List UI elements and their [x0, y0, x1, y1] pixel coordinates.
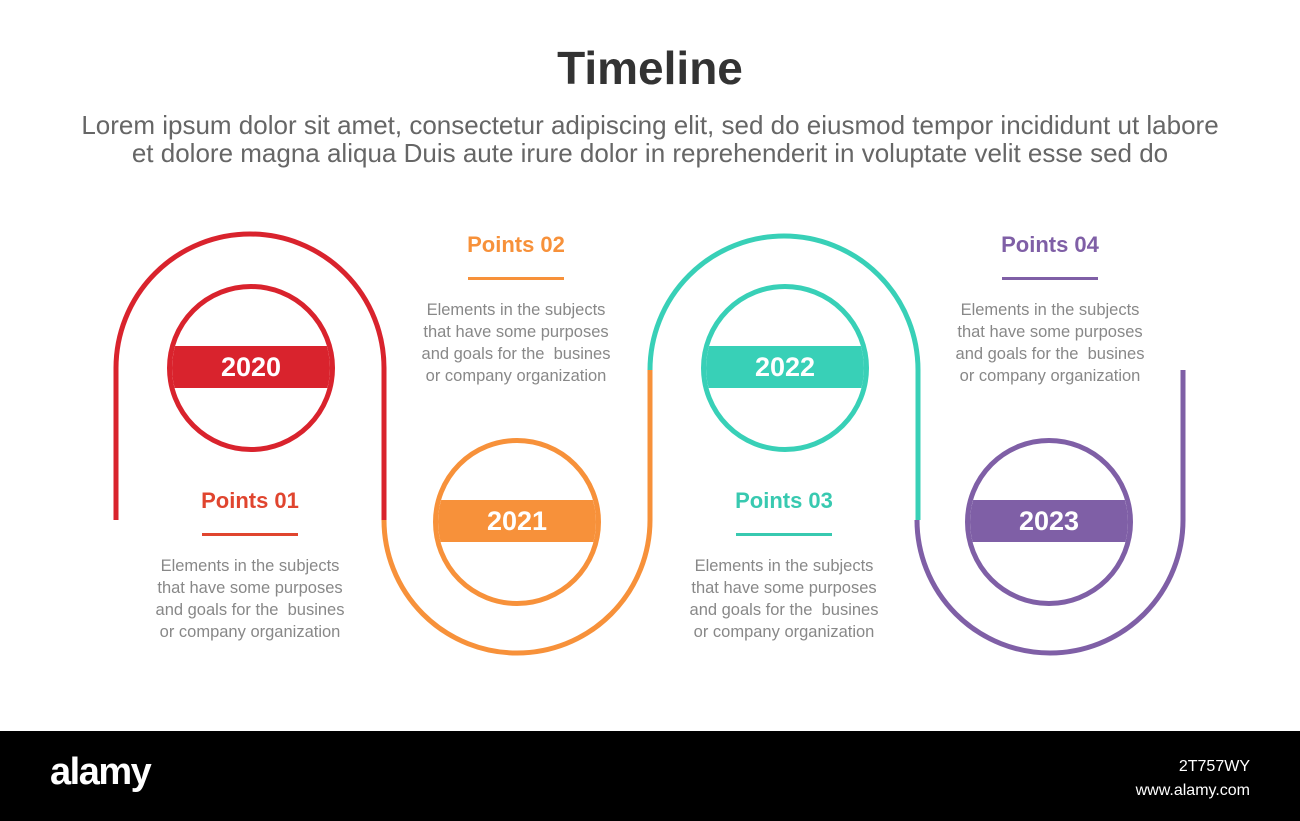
point 01 — [156, 488, 344, 641]
title: Timeline — [557, 42, 743, 94]
subtitle: et dolore magna aliqua Duis aute irure dolor in reprehenderit in voluptate velit esse sed do — [132, 138, 1168, 168]
circle 2023 — [965, 438, 1133, 606]
point 04: and goals for the busines — [956, 345, 1144, 363]
circle 2021: 2021 — [487, 506, 547, 536]
footer id — [1136, 758, 1250, 799]
footer id: 2T757WY — [1179, 758, 1250, 775]
point 02 — [422, 232, 610, 385]
point 04: Points 04 — [1001, 232, 1099, 257]
point 01: that have some purposes — [157, 579, 343, 597]
point 02: Elements in the subjects — [427, 301, 605, 319]
circle 2020 — [167, 284, 335, 452]
circle 2020: 2020 — [221, 352, 281, 382]
point 02: Points 02 — [467, 232, 565, 257]
point 04: or company organization — [960, 367, 1140, 385]
circle 2023: 2023 — [1019, 506, 1079, 536]
point 03: Elements in the subjects — [695, 557, 873, 575]
point 03: or company organization — [694, 623, 874, 641]
point 04 — [956, 232, 1144, 385]
point 01: or company organization — [160, 623, 340, 641]
point 02: and goals for the busines — [422, 345, 610, 363]
point 01: Elements in the subjects — [161, 557, 339, 575]
point 01: and goals for the busines — [156, 601, 344, 619]
circle 2022: 2022 — [755, 352, 815, 382]
footer id: www.alamy.com — [1136, 782, 1250, 799]
point 01: Points 01 — [201, 488, 299, 513]
point 03: and goals for the busines — [690, 601, 878, 619]
footer bar — [0, 731, 1300, 821]
subtitle: Lorem ipsum dolor sit amet, consectetur adipiscing elit, sed do eiusmod tempor incididunt ut labore — [81, 110, 1219, 140]
point 02: or company organization — [426, 367, 606, 385]
point 02: that have some purposes — [423, 323, 609, 341]
subtitle — [81, 110, 1219, 168]
point 04: Elements in the subjects — [961, 301, 1139, 319]
point 03: that have some purposes — [691, 579, 877, 597]
point 04: that have some purposes — [957, 323, 1143, 341]
circle 2022 — [701, 284, 869, 452]
footer logo: alamy — [50, 751, 150, 793]
circle 2021 — [433, 438, 601, 606]
point 03 — [690, 488, 878, 641]
point 03: Points 03 — [735, 488, 833, 513]
